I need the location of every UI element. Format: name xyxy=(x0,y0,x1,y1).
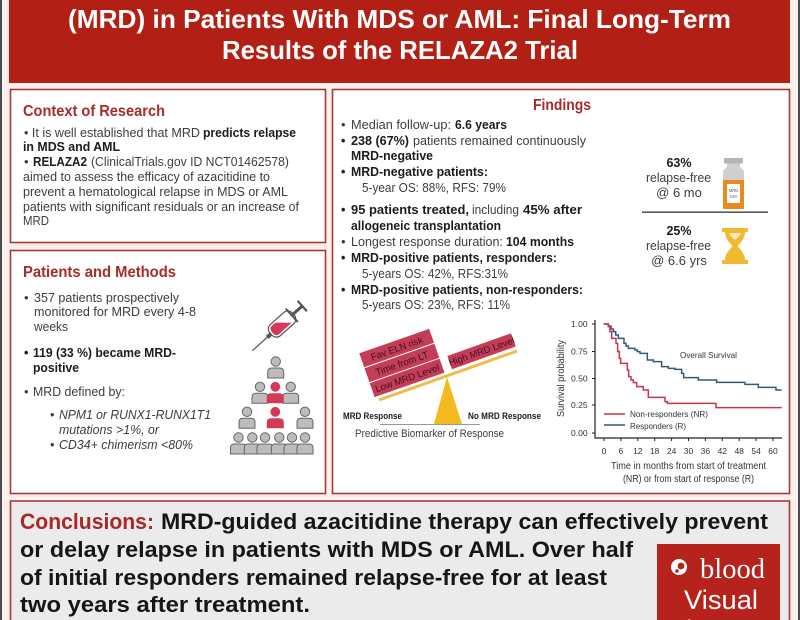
x axis labels: 54 xyxy=(751,446,761,456)
diagram: predictive biomarker seesaw: No MRD Response xyxy=(468,411,541,422)
x axis labels: 36 xyxy=(701,446,710,456)
icon: syringe xyxy=(246,299,308,357)
y axis labels: 0.25 xyxy=(571,400,588,410)
fulcrum xyxy=(434,377,462,424)
text block: findings list: • xyxy=(341,165,345,179)
text block: methods: weeks xyxy=(33,319,68,334)
chart: survival curves: Overall Survival xyxy=(680,350,737,360)
text block: context: MRD xyxy=(23,213,49,228)
blocks: MRD response xyxy=(359,329,444,397)
title: Results of the RELAZA2 Trial xyxy=(222,35,578,65)
diagram: predictive biomarker seesaw xyxy=(343,329,541,440)
icon: hourglass xyxy=(722,228,748,264)
text block: methods: • xyxy=(24,384,29,399)
text block: findings list: • xyxy=(341,251,345,265)
text block: methods: CD34+ chimerism <80% xyxy=(59,437,193,452)
beam xyxy=(379,351,517,400)
text block: methods: • xyxy=(50,437,55,452)
icon: vial: MRD xyxy=(729,188,738,193)
text block: context: prevent a hematological relapse in MDS or AML xyxy=(23,184,288,199)
x axis labels: 12 xyxy=(633,446,643,456)
text block: context: predicts relapse xyxy=(203,126,296,140)
text block: context: • It is well established that MRD xyxy=(24,125,200,140)
y axis labels: 0.00 xyxy=(571,428,588,438)
conclusions text: Conclusions: xyxy=(20,509,154,534)
text block: methods: mutations >1%, or xyxy=(59,422,160,437)
text block: findings list: 5-year OS: 88%, RFS: 79% xyxy=(362,180,506,195)
x axis labels: 6 xyxy=(619,446,624,456)
text block: findings list: • xyxy=(341,283,345,297)
text block: findings list: • xyxy=(341,234,346,249)
text block: findings list: including xyxy=(472,202,519,217)
diagram: predictive biomarker seesaw: MRD Response xyxy=(343,411,402,422)
heading: findings: Findings xyxy=(533,97,591,114)
icon: patient pyramid xyxy=(230,357,313,454)
callout: relapse-free 6.6 years: 25% xyxy=(666,224,692,238)
text block: findings list: patients remained continuously xyxy=(413,133,586,148)
text block: methods: NPM1 or RUNX1-RUNX1T1 xyxy=(59,407,211,422)
blocks: MRD response: Time from LT xyxy=(374,350,430,378)
panel: context of research xyxy=(10,90,326,242)
blocks: MRD response: Fav ELN risk xyxy=(370,335,425,363)
x axis labels: 24 xyxy=(667,446,677,456)
text block: findings list: MRD-positive patients, non-responders: xyxy=(351,283,583,297)
y axis labels xyxy=(571,319,588,438)
text block: methods: • xyxy=(24,290,29,305)
y axis labels: 1.00 xyxy=(571,319,588,329)
icon: blood logo drop xyxy=(671,559,687,575)
text block: methods: positive xyxy=(33,361,79,375)
x axis labels: 0 xyxy=(602,446,607,456)
text block: methods: • xyxy=(24,346,28,360)
text block: findings list: 5-years OS: 42%, RFS:31% xyxy=(362,266,508,281)
text block: context: patients with significant residuals or an increase of xyxy=(23,199,299,214)
x axis labels: 30 xyxy=(684,446,693,456)
text block: findings list: MRD-negative patients: xyxy=(351,165,488,179)
x axis labels: 18 xyxy=(650,446,660,456)
text block: findings list: 5-years OS: 23%, RFS: 11% xyxy=(362,297,510,312)
text block: context xyxy=(23,125,299,228)
chart: survival curves: Time in months from start of treatment xyxy=(611,460,766,472)
logo: blood visual abstract: blood xyxy=(700,554,765,585)
conclusions text xyxy=(20,509,769,617)
legend: Non-responders (NR) xyxy=(630,409,708,419)
text block: context: in MDS and AML xyxy=(23,140,120,154)
text block: context: • xyxy=(24,154,29,169)
block: high MRD level: High MRD Level xyxy=(447,335,516,369)
title xyxy=(68,4,731,65)
callout: relapse-free 6 months: relapse-free xyxy=(646,170,711,185)
panel: findings xyxy=(332,90,790,494)
conclusions text: or delay relapse in patients with MDS or AML. Over half xyxy=(20,537,634,562)
text block: methods: monitored for MRD every 4-8 xyxy=(34,304,196,319)
heading: patients and methods: Patients and Methods xyxy=(23,264,176,281)
y axis labels: 0.50 xyxy=(571,374,588,384)
conclusions text: two years after treatment. xyxy=(20,592,310,617)
text block: findings list: allogeneic transplantation xyxy=(351,219,501,233)
callout: relapse-free 6.6 years: relapse-free xyxy=(646,238,711,253)
text block: context: aimed to assess the efficacy of azacitidine to xyxy=(23,169,270,184)
conclusions text: of initial responders remained relapse-free for at least xyxy=(20,565,608,590)
text block: findings list: • xyxy=(341,203,345,217)
text block: findings list: MRD-negative xyxy=(351,149,433,163)
conclusions text: MRD-guided azacitidine therapy can effectively prevent xyxy=(161,509,769,534)
text block: context: RELAZA2 xyxy=(33,155,87,169)
text block: context: (ClinicalTrials.gov ID NCT01462578) xyxy=(91,154,289,169)
text block: findings list: • xyxy=(341,117,346,132)
text block: methods: 119 (33 %) became MRD- xyxy=(33,346,176,360)
title: (MRD) in Patients With MDS or AML: Final Long-Term xyxy=(68,4,731,34)
panel: conclusions xyxy=(10,501,790,620)
curves xyxy=(604,324,782,408)
text block: methods: MRD defined by: xyxy=(33,384,125,399)
text block: findings list: MRD-positive patients, responders: xyxy=(351,251,557,265)
callout: relapse-free 6.6 years: @ 6.6 yrs xyxy=(651,253,707,268)
panel: patients and methods xyxy=(10,250,326,494)
callout: relapse-free 6 months xyxy=(646,156,711,200)
callout: relapse-free 6.6 years xyxy=(646,224,711,268)
logo: blood visual abstract xyxy=(657,544,780,620)
text block: methods xyxy=(24,290,211,452)
diagram: predictive biomarker seesaw: Predictive Biomarker of Response xyxy=(355,428,504,440)
axes xyxy=(595,320,782,438)
callout: relapse-free 6 months: @ 6 mo xyxy=(656,185,702,200)
heading: context of research: Context of Research xyxy=(23,103,165,120)
text block: findings list: 95 patients treated, xyxy=(351,203,469,217)
logo: blood visual abstract: Visual xyxy=(684,585,758,615)
header banner xyxy=(9,0,790,83)
text block: findings list xyxy=(341,117,586,312)
legend xyxy=(604,409,708,431)
chart: survival curves xyxy=(555,319,782,485)
x axis labels: 42 xyxy=(718,446,727,456)
text block: findings list: 104 months xyxy=(506,235,574,249)
blocks: MRD response: Low MRD Level xyxy=(374,363,441,395)
chart: survival curves: Survival probability xyxy=(555,339,567,417)
text block: findings list: • xyxy=(341,134,345,148)
text block: methods: • xyxy=(50,407,55,422)
x axis labels xyxy=(602,446,778,456)
x axis labels: 60 xyxy=(768,446,778,456)
legend: Responders (R) xyxy=(630,421,686,431)
icon: vial xyxy=(723,158,744,209)
icon: vial: AZA xyxy=(729,194,738,199)
chart: survival curves: (NR) or from start of response (R) xyxy=(623,473,754,485)
text block: findings list: 6.6 years xyxy=(455,118,507,132)
text block: findings list: 45% after xyxy=(523,203,582,217)
text block: findings list: Longest response duration: xyxy=(351,234,503,249)
callout: relapse-free 6 months: 63% xyxy=(666,156,692,170)
x axis labels: 48 xyxy=(734,446,744,456)
text block: findings list: Median follow-up: xyxy=(351,117,451,132)
y axis labels: 0.75 xyxy=(571,346,588,356)
text block: methods: 357 patients prospectively xyxy=(34,290,179,305)
text block: findings list: 238 (67%) xyxy=(351,134,409,148)
